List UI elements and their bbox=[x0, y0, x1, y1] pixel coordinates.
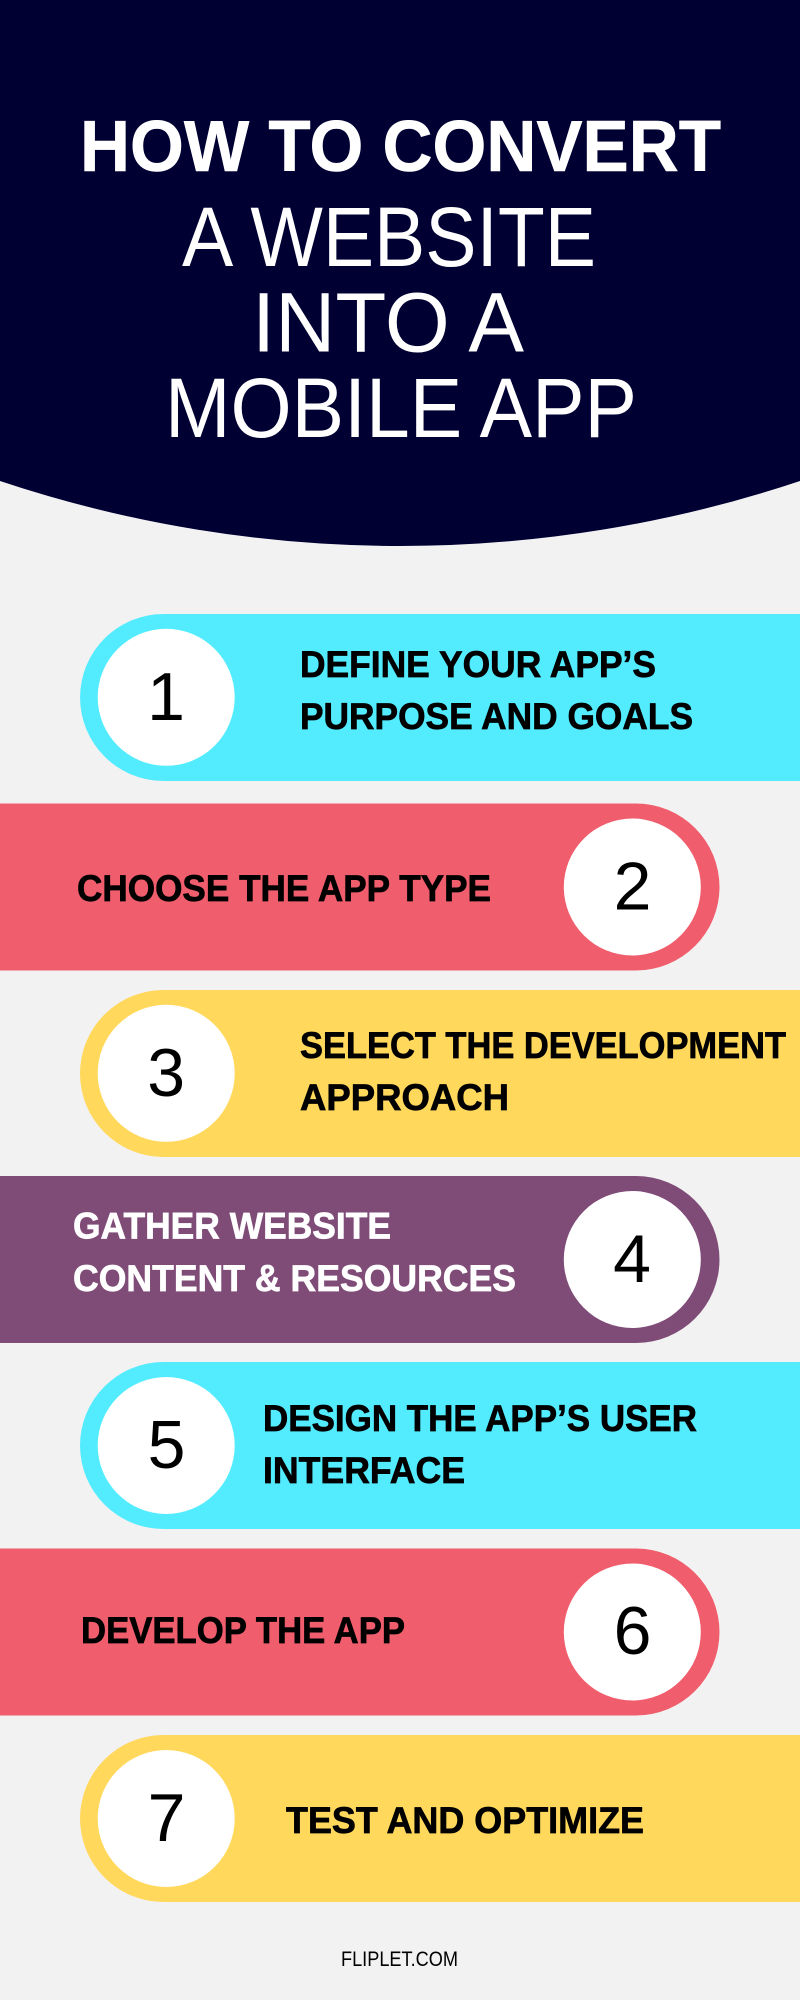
step 4 bbox=[0, 1176, 720, 1343]
step 1 bbox=[80, 614, 800, 781]
step 1: DEFINE YOUR APP’S bbox=[300, 644, 656, 685]
step 2: 2 bbox=[614, 848, 651, 924]
step 1: PURPOSE AND GOALS bbox=[300, 696, 693, 737]
step 5: INTERFACE bbox=[263, 1450, 465, 1491]
step 5 bbox=[80, 1362, 800, 1529]
title bbox=[80, 107, 721, 455]
step 7: TEST AND OPTIMIZE bbox=[286, 1800, 644, 1841]
step 4: 4 bbox=[613, 1221, 651, 1297]
step 2 bbox=[0, 804, 720, 970]
step 3: APPROACH bbox=[300, 1077, 509, 1118]
step 6: DEVELOP THE APP bbox=[81, 1610, 405, 1651]
step 3: 3 bbox=[147, 1035, 185, 1111]
step 5: 5 bbox=[148, 1407, 185, 1483]
step 1: 1 bbox=[147, 659, 185, 735]
title: HOW TO CONVERT bbox=[80, 107, 721, 187]
step 2: CHOOSE THE APP TYPE bbox=[77, 868, 491, 909]
title: INTO A bbox=[252, 276, 524, 370]
step 3 bbox=[80, 990, 800, 1157]
title: A WEBSITE bbox=[182, 190, 596, 284]
step 4: CONTENT & RESOURCES bbox=[73, 1258, 516, 1299]
step 4: GATHER WEBSITE bbox=[73, 1206, 391, 1246]
step 7 bbox=[80, 1735, 800, 1902]
step 7: 7 bbox=[148, 1780, 185, 1856]
step 5: DESIGN THE APP’S USER bbox=[263, 1398, 697, 1439]
header panel bbox=[0, 0, 800, 546]
title: MOBILE APP bbox=[165, 361, 637, 455]
step 6 bbox=[0, 1548, 720, 1716]
footer: FLIPLET.COM bbox=[341, 1948, 458, 1971]
step 6: 6 bbox=[614, 1593, 651, 1669]
